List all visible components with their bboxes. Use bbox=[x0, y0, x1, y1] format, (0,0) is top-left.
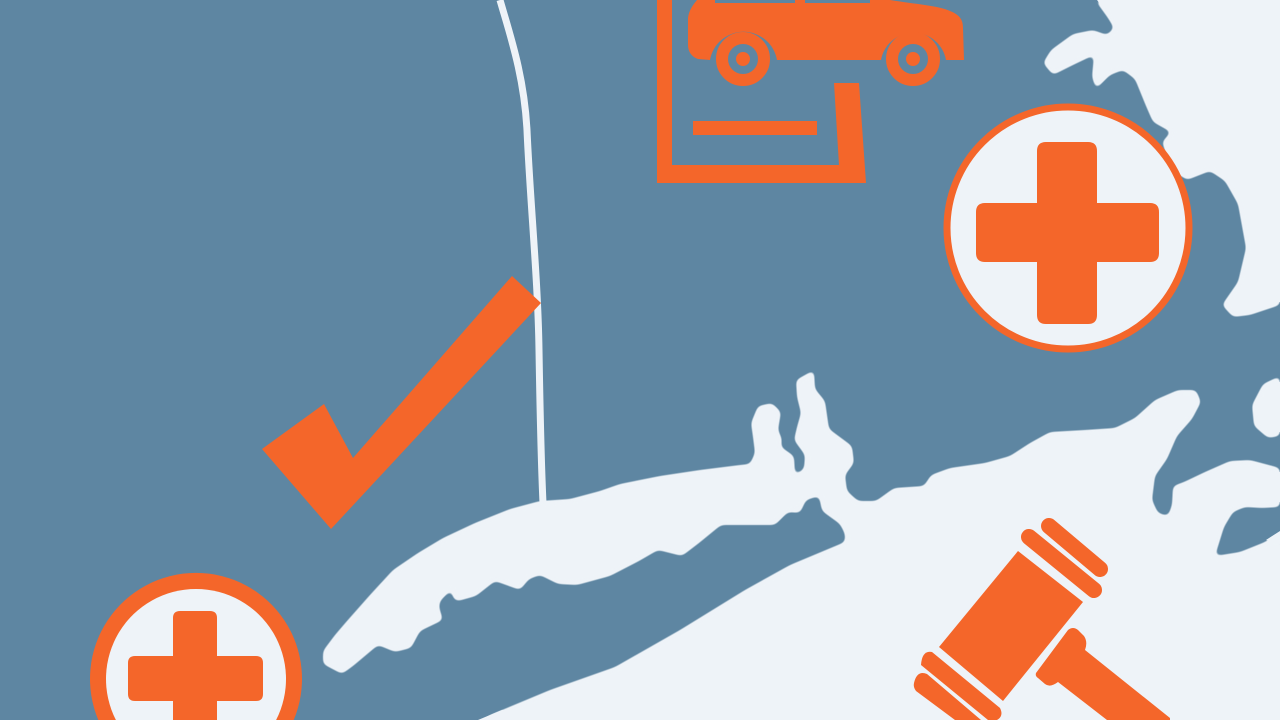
icon: gavel bbox=[914, 526, 1170, 720]
truck front wheel bbox=[722, 38, 764, 80]
gavel upper band bbox=[1029, 537, 1094, 590]
gavel lower band bbox=[921, 652, 1001, 720]
icon: medical cross large bbox=[947, 107, 1189, 349]
land: long island and southern coast bbox=[323, 370, 1280, 720]
truck rear wheel bbox=[892, 38, 934, 80]
gavel top cap bbox=[1049, 526, 1100, 569]
icon: vehicle on document bbox=[657, 0, 964, 183]
state border line bbox=[500, 0, 543, 503]
gavel bottom cap bbox=[914, 673, 981, 720]
truck windows bbox=[715, 0, 870, 3]
truck body bbox=[688, 0, 964, 60]
icon: medical cross small bbox=[90, 573, 302, 720]
gavel handle bbox=[1036, 628, 1170, 720]
gavel head bbox=[939, 551, 1083, 701]
land: northeast coast bbox=[1043, 0, 1280, 317]
land edge patches bbox=[478, 0, 1280, 720]
land: small island at right bbox=[1252, 376, 1280, 438]
document outline bbox=[657, 0, 866, 183]
document text line bbox=[693, 121, 817, 135]
icon: check mark bbox=[262, 276, 541, 529]
